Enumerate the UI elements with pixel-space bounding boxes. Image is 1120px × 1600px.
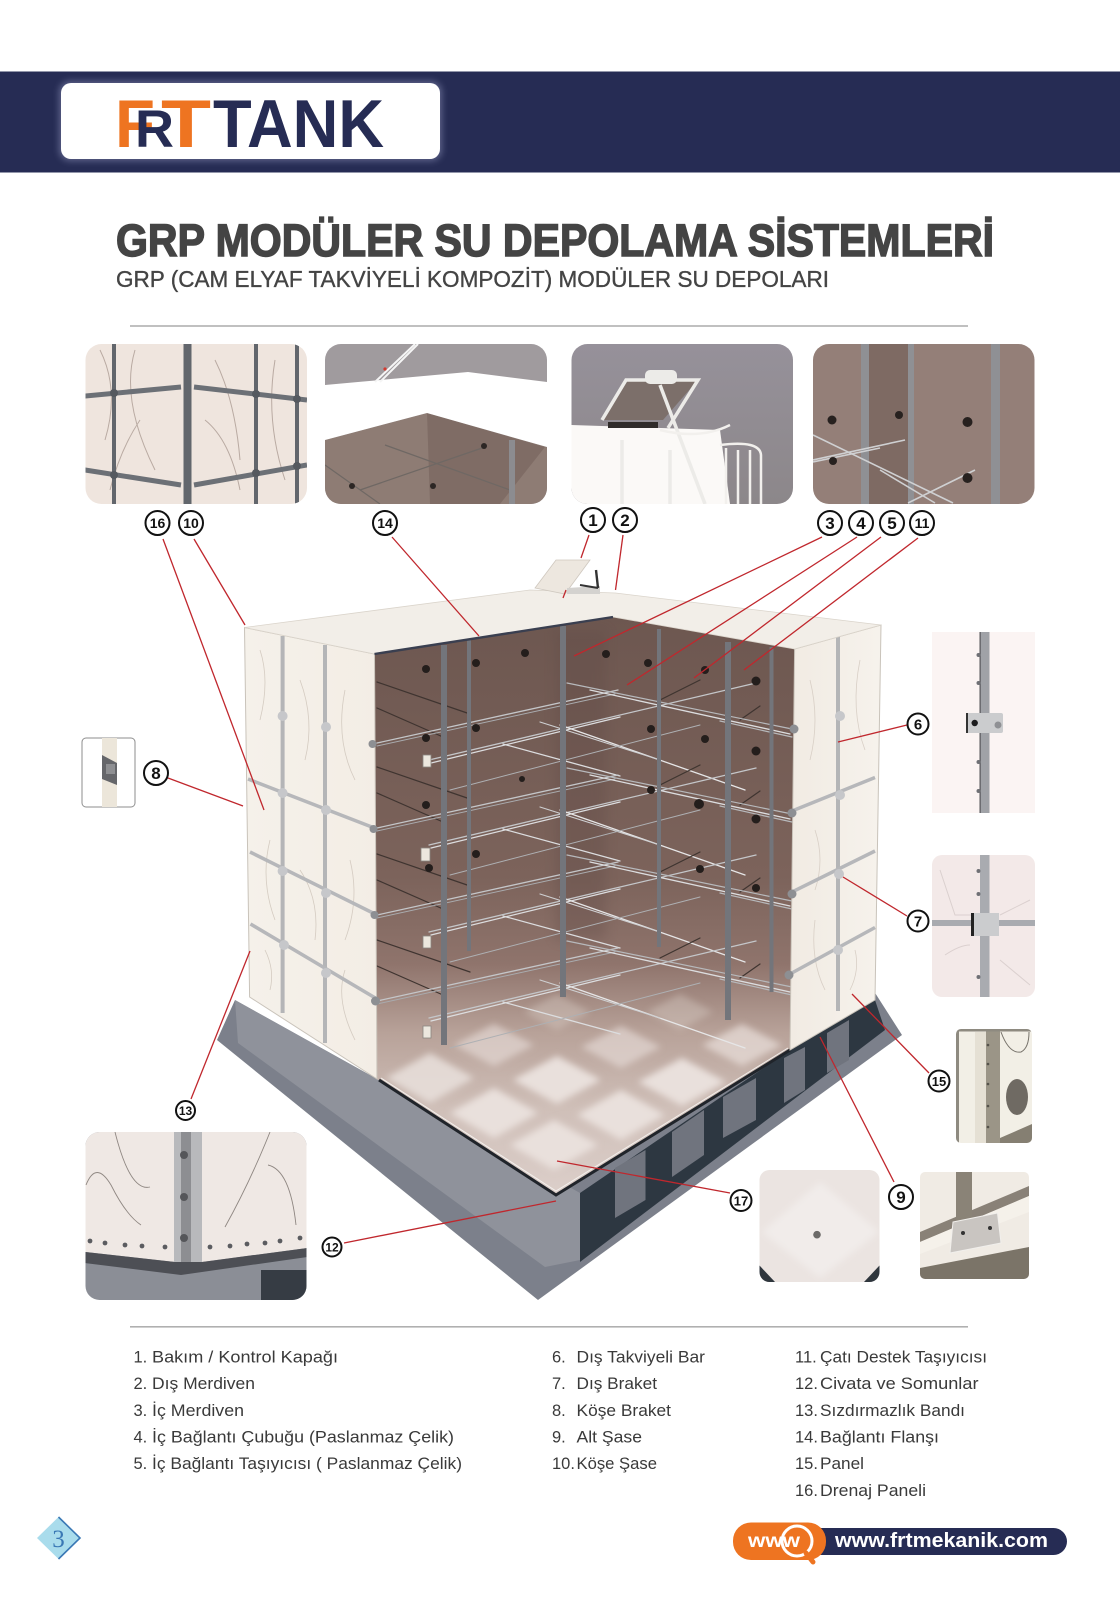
legend column 3: Panel (820, 1455, 864, 1473)
legend column 1: İç Bağlantı Çubuğu (Paslanmaz Çelik) (152, 1428, 454, 1446)
tank base frame (217, 985, 902, 1300)
number badges: 2 (620, 511, 630, 530)
number badges: 8 (151, 764, 161, 783)
photo: maintenance hatch and ladder (571, 344, 794, 504)
number badges: 6 (914, 716, 922, 734)
photo: lower chassis bracket (920, 1172, 1029, 1279)
page number diamond: 3 (52, 1526, 65, 1553)
website badge: www (747, 1531, 800, 1552)
legend column 1: 3. (134, 1402, 147, 1420)
photo: interior ladder and tie rods (813, 344, 1035, 504)
tank interior (374, 617, 795, 1195)
brackets (421, 755, 431, 1038)
legend column 2: 6. (552, 1348, 566, 1366)
photo: external bracket (932, 855, 1035, 997)
legend column 1: İç Merdiven (152, 1401, 244, 1420)
base ribs (580, 985, 885, 1262)
interior vertical struts (441, 626, 774, 1045)
photo: panel (956, 1029, 1032, 1143)
legend column 3: Çatı Destek Taşıyıcısı (820, 1348, 987, 1366)
legend column 2: 9. (552, 1428, 566, 1446)
number badges: 5 (887, 514, 897, 533)
legend column 1: Dış Merdiven (152, 1375, 255, 1393)
legend column 3 (795, 1348, 987, 1500)
legend column 1: 2. (134, 1375, 147, 1393)
website badge (733, 1522, 1067, 1562)
legend column 3: 14. (795, 1428, 818, 1446)
legend column 2: Dış Takviyeli Bar (576, 1348, 706, 1366)
legend column 1: Bakım / Kontrol Kapağı (152, 1348, 338, 1366)
number badges: 16 (150, 515, 165, 531)
legend column 1 (134, 1348, 462, 1473)
legend column 2: 7. (552, 1375, 566, 1393)
tie rods (377, 680, 792, 1048)
number badges: 11 (915, 515, 930, 531)
floor panels (386, 994, 782, 1170)
number badges: 14 (377, 515, 393, 531)
leader lines (163, 535, 929, 1243)
number badges: 13 (179, 1104, 192, 1118)
legend column 3: Sızdırmazlık Bandı (820, 1402, 965, 1420)
logo card: R (135, 100, 174, 159)
number badges: 10 (183, 515, 199, 531)
number badges: 17 (734, 1194, 748, 1208)
legend column 3: Bağlantı Flanşı (820, 1428, 939, 1446)
legend column 3: 13. (795, 1402, 818, 1420)
left tank wall (244, 628, 380, 1079)
page number diamond (37, 1517, 80, 1559)
logo card (59, 81, 442, 162)
legend column 3: Civata ve Somunlar (820, 1375, 979, 1393)
logo card: TANK (213, 86, 384, 162)
website badge: www.frtmekanik.com (834, 1530, 1048, 1552)
photo: frame corner exterior (85, 344, 307, 504)
legend column 2: Alt Şase (576, 1428, 642, 1446)
photo: sealing band corner (85, 1132, 307, 1300)
logo card: T (161, 86, 211, 162)
legend column 1: 5. (134, 1455, 147, 1473)
legend column 1: 1. (134, 1348, 147, 1366)
legend column 2: 10. (552, 1455, 575, 1473)
number badges: 12 (325, 1240, 339, 1254)
legend column 2: Dış Braket (576, 1375, 657, 1393)
number badges (144, 508, 950, 1256)
header banner (0, 72, 1120, 172)
photo: corner bracket (82, 738, 135, 807)
photo: connection flange under roof (325, 344, 547, 504)
title: GRP MODÜLER SU DEPOLAMA SİSTEMLERİ (116, 215, 994, 266)
roof hatch (535, 560, 600, 594)
legend column 2: 8. (552, 1402, 566, 1420)
legend column 3: 15. (795, 1455, 818, 1473)
logo card: F (115, 86, 155, 162)
legend column 1: 4. (134, 1428, 147, 1446)
subtitle: GRP (CAM ELYAF TAKVİYELİ KOMPOZİT) MODÜLER SU DEPOLARI (116, 266, 829, 292)
legend column 2: Köşe Şase (576, 1455, 657, 1473)
number badges: 7 (914, 914, 922, 930)
legend column 1: İç Bağlantı Taşıyıcısı ( Paslanmaz Çelik) (152, 1454, 462, 1473)
photo: external reinforcement bar (932, 632, 1035, 813)
legend column 3: 12. (795, 1375, 818, 1393)
number badges: 3 (825, 514, 835, 533)
number badges: 15 (932, 1074, 946, 1089)
legend column 3: Drenaj Paneli (820, 1482, 926, 1500)
number badges: 1 (588, 511, 598, 530)
number badges: 4 (856, 514, 866, 533)
legend column 3: 16. (795, 1482, 818, 1500)
right tank wall (784, 625, 881, 1050)
legend column 3: 11. (795, 1348, 817, 1366)
legend column 2 (552, 1348, 706, 1473)
photo: drainage panel (759, 1170, 880, 1282)
wall bolts (422, 649, 760, 892)
legend column 2: Köşe Braket (576, 1402, 671, 1420)
number badges: 9 (896, 1188, 906, 1207)
tank roof (244, 560, 881, 654)
